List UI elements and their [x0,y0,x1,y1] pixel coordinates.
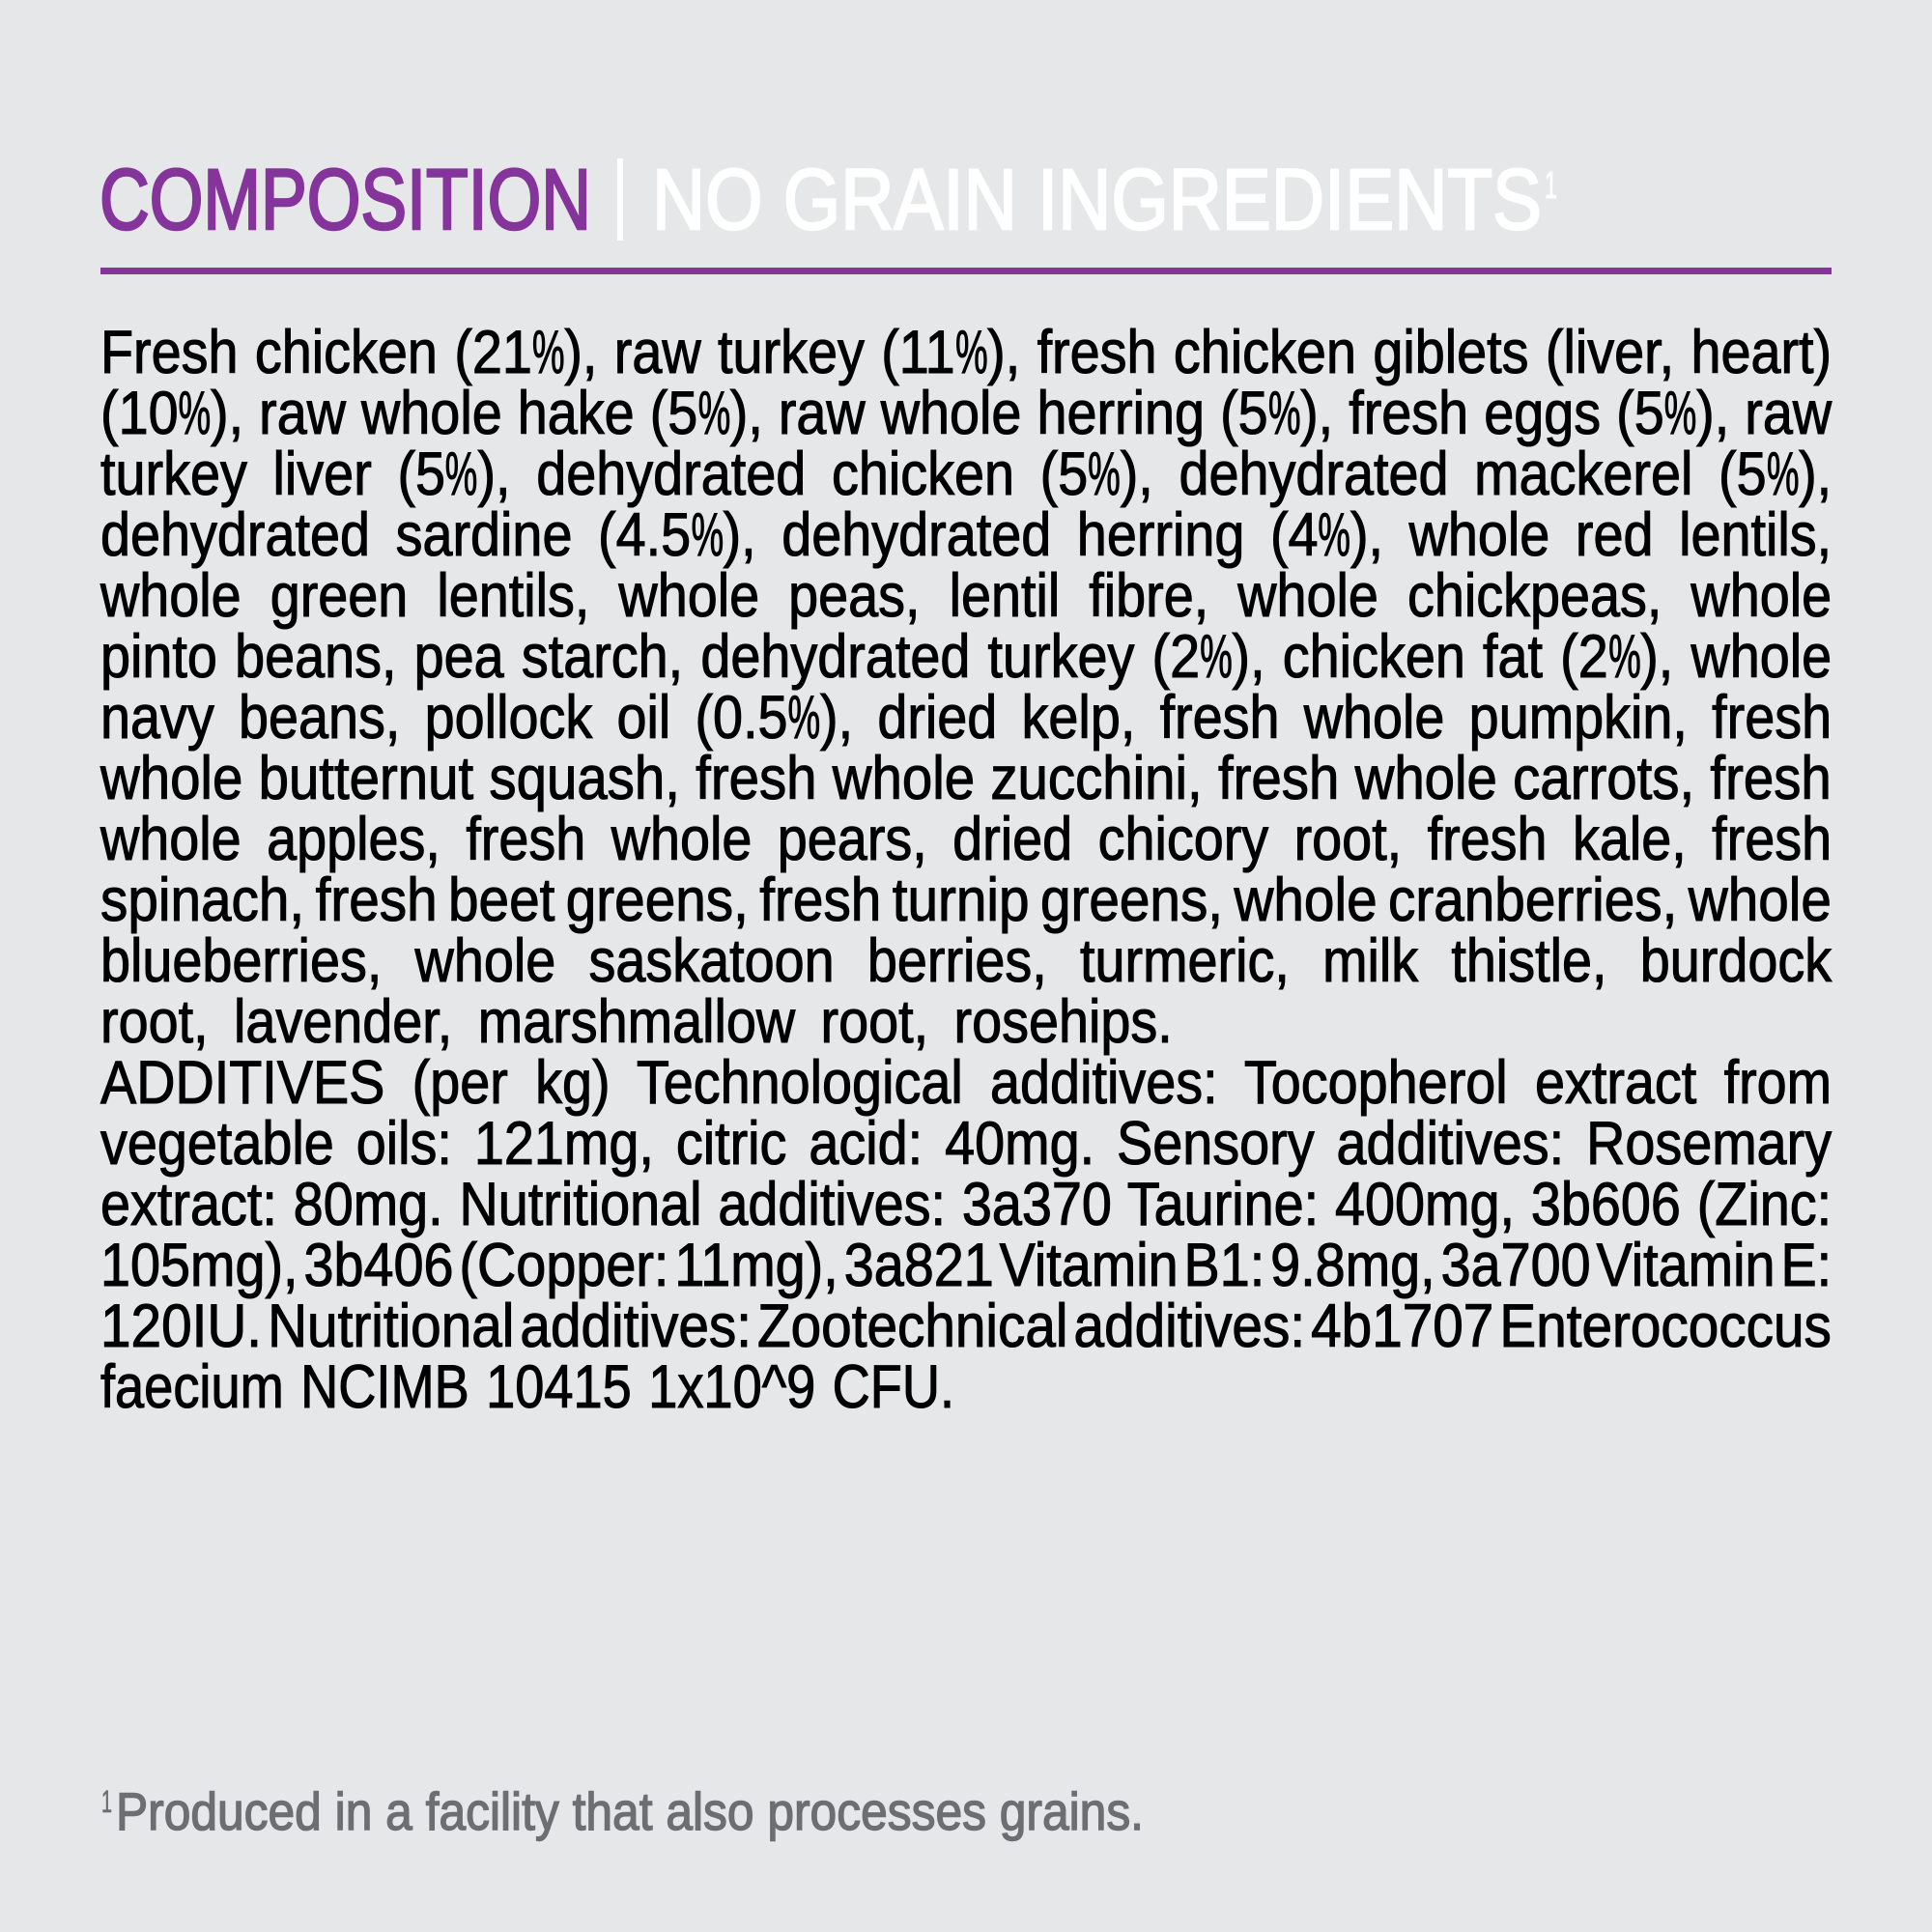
text block: ingredients: (10 ), raw whole hake (5 ), raw whole herring (5 ), fresh eggs (5 ), raw [100,380,1832,447]
footnote marker: 1 [101,1784,112,1819]
text block: ingredients: % [1200,623,1233,691]
heading: superscript: 1 [1545,164,1557,207]
text block: ingredients: % [1319,501,1350,569]
text block: ingredients: turkey liver (5 ), dehydrated chicken (5 ), dehydrated mackerel (5 ), [100,440,1832,508]
text block: ingredients: % [788,684,820,752]
text block: additives: extract: 80mg. Nutritional additives: 3a370 Taurine: 400mg, 3b606 (Zinc: [100,1171,1832,1238]
text block: ingredients: blueberries, whole saskatoon berries, turmeric, milk thistle, burdock [100,927,1832,995]
text block: ingredients: % [445,440,478,508]
footnote text: Produced in a facility that also processes grains. [116,1781,1144,1841]
text block: ingredients: % [697,380,730,447]
text block: additives: 105mg), 3b406 (Copper: 11mg), 3a821 Vitamin B1: 9.8mg, 3a700 Vitamin E: [100,1232,1832,1299]
text block: ingredients [99,319,1833,1056]
text block: ingredients: whole green lentils, whole peas, lentil fibre, whole chickpeas, whole [100,562,1832,630]
text block: ingredients: % [532,319,565,386]
text block: ingredients: pinto beans, pea starch, dehydrated turkey (2 ), chicken fat (2 ), whole [100,623,1832,691]
heading: separator [617,158,623,241]
text block: ingredients: % [1608,623,1640,691]
text block: ingredients: % [955,319,987,386]
text block: ingredients: % [179,380,211,447]
text block: ingredients: % [1088,440,1121,508]
text block: ingredients: whole apples, fresh whole pears, dried chicory root, fresh kale, fresh [100,806,1832,873]
text block: additives [99,1049,1833,1421]
text block: ingredients: dehydrated sardine (4.5 ), dehydrated herring (4 ), whole red lentils, [100,501,1832,569]
text block: ingredients: root, lavender, marshmallow root, rosehips. [100,988,1173,1056]
text block: additives: vegetable oils: 121mg, citric acid: 40mg. Sensory additives: Rosemary [100,1110,1832,1178]
text block: ingredients: % [691,501,724,569]
heading: COMPOSITION: COMPOSITION [99,151,591,247]
heading rule [100,268,1832,274]
text block: additives: ADDITIVES (per kg) Technological additives: Tocopherol extract from [100,1049,1832,1117]
heading: NO GRAIN INGREDIENTS: NO GRAIN INGREDIENTS [652,151,1542,247]
text block: ingredients: Fresh chicken (21 ), raw turkey (11 ), fresh chicken giblets (liver, heart) [100,319,1832,386]
text block: ingredients: whole butternut squash, fresh whole zucchini, fresh whole carrots, fresh [100,745,1832,812]
text block: ingredients: % [1664,380,1696,447]
text block: additives: faecium NCIMB 10415 1x10^9 CFU. [100,1353,954,1421]
text block: ingredients: navy beans, pollock oil (0.5 ), dried kelp, fresh whole pumpkin, fresh [100,684,1832,752]
text block: ingredients: % [1268,380,1300,447]
title: composition heading [99,151,1832,274]
text block: ingredients: % [1767,440,1799,508]
text block: additives: 120IU. Nutritional additives: Zootechnical additives: 4b1707 Enterococcus [100,1293,1832,1360]
text block: ingredients: spinach, fresh beet greens, fresh turnip greens, whole cranberries, whole [100,867,1832,934]
